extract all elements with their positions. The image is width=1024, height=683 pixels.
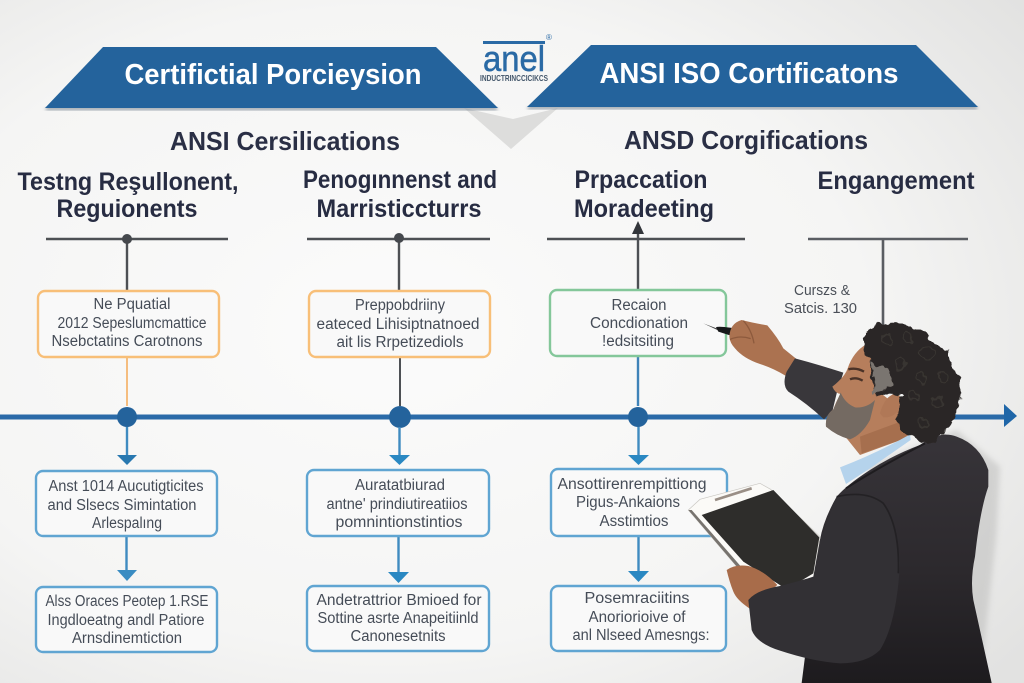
left hand (727, 565, 777, 608)
flow arrows column 3 (628, 427, 649, 582)
flow arrows column 2 (388, 427, 410, 583)
grey chevron behind banners (464, 108, 558, 149)
raised sleeve (785, 358, 843, 419)
column heading 3 (574, 166, 714, 223)
box: blue row 2 col 3: Anoriorioive of (588, 609, 686, 626)
column heading 4: Engangement (818, 167, 975, 195)
shirt collar (840, 434, 911, 484)
box: green: Recaion (612, 297, 666, 314)
arrow: up to column 3 heading (632, 221, 644, 234)
box: orange 1: Nsebctatins Carotnons (52, 333, 203, 350)
box: blue row 1 col 2: pomnintionstintios (336, 514, 463, 531)
timeline arrow (0, 404, 1017, 427)
logo: ® (546, 33, 552, 42)
box: green (550, 290, 726, 356)
note text: column 4: Satcis. 130 (784, 301, 857, 317)
logo: anel (483, 38, 545, 79)
box: blue row 2 col 3 (551, 586, 726, 651)
pen (703, 323, 750, 341)
column heading 1: Reguionents (56, 195, 198, 223)
presenter: man pointing at the board with tablet (688, 320, 1000, 683)
box: blue row 2 col 2: Sottine asrte Anapeitiinld (318, 610, 478, 627)
box: blue row 1 col 2: antne' prindiutireatiios (326, 496, 468, 513)
column heading 1 (18, 168, 238, 223)
subheading: right: ANSD Corgifications (624, 125, 868, 155)
box: orange 1: Ne Pquatial (94, 296, 170, 313)
box: blue row 2 col 1 (36, 587, 217, 652)
box: orange 1: 2012 Sepeslumcmattice (58, 315, 206, 332)
box: blue row 2 col 3: anl Nlseed Amesngs: (572, 627, 710, 644)
box: green: !edsitsiting (602, 333, 674, 350)
column heading 2: Marristiccturrs (316, 195, 482, 223)
box: blue row 1 col 3: Ansottirenrempittiong (558, 476, 706, 493)
box: blue row 2 col 2: Andetrattrior Bmioed for (316, 592, 482, 609)
box: blue row 2 col 1: Arnsdinemtiction (72, 630, 182, 647)
note text: column 4 (784, 283, 857, 317)
column heading 1: Testng Reşullonent, (18, 168, 238, 196)
timeline node 3 (628, 407, 648, 427)
subheading: left: ANSI Cersilications (170, 126, 400, 156)
beard (826, 393, 875, 439)
jacket body (802, 435, 992, 683)
box: orange 2: Preppobdriiny (355, 297, 445, 314)
box: orange 2 (309, 291, 490, 357)
timeline node 2 (389, 406, 411, 428)
bracket lines under headings (46, 232, 968, 326)
box: blue row 1 col 1: Anst 1014 Aucutigticites (48, 478, 204, 495)
banner: right heading (527, 45, 978, 109)
box: blue row 1 col 1: Arlespalıng (92, 515, 162, 532)
box: blue row 1 col 2: Auratatbiurad (355, 477, 445, 494)
column heading 3: Prpaccation (574, 166, 708, 194)
box: orange 2: eateced Lihisiptnatnoed (316, 316, 480, 333)
flow arrows column 1 (117, 427, 137, 581)
box: blue row 1 col 3: Asstimtios (600, 513, 669, 530)
face and neck (826, 344, 910, 455)
logo: INDUCTRINCCICIKCS (480, 73, 548, 83)
box: blue row 1 col 1: and Slsecs Simintation (48, 497, 196, 514)
box: blue row 1 col 3 (551, 469, 727, 536)
banner: left heading (45, 47, 498, 110)
box: orange 2: ait lis Rrpetizediols (336, 334, 464, 351)
box: green: Concdionation (590, 315, 688, 332)
box: blue row 2 col 2: Canonesetnits (350, 628, 446, 645)
banner: right heading: ANSI ISO Cortificatons (600, 58, 898, 90)
lower sleeve (748, 493, 900, 663)
banner: left heading: Certifictial Porcieysion (124, 59, 422, 91)
box: blue row 1 col 1 (36, 471, 217, 536)
box: blue row 1 col 2 (307, 470, 489, 536)
box: blue row 2 col 2 (307, 586, 489, 651)
column heading 3: Moradeeting (574, 195, 714, 223)
box: blue row 2 col 3: Posemraciitins (584, 590, 690, 607)
column heading 2: Penogınnenst and (303, 166, 497, 194)
box: blue row 2 col 1: Alss Oraces Peotep 1.RSE (46, 593, 208, 610)
connectors: boxes to timeline (127, 357, 638, 406)
note text: column 4: Curszs & (794, 283, 850, 299)
right hand (729, 320, 796, 376)
hair (864, 323, 962, 446)
column heading 2 (303, 166, 497, 223)
box: blue row 2 col 1: Ingdloeatng andl Patiore (48, 612, 204, 629)
ear (880, 393, 901, 417)
box: orange 1 (38, 291, 219, 357)
box: blue row 1 col 3: Pigus-Ankaions (576, 494, 680, 511)
timeline node 1 (117, 407, 137, 427)
tablet (688, 483, 820, 594)
sleeve fold (837, 494, 898, 573)
lapel (846, 443, 925, 488)
